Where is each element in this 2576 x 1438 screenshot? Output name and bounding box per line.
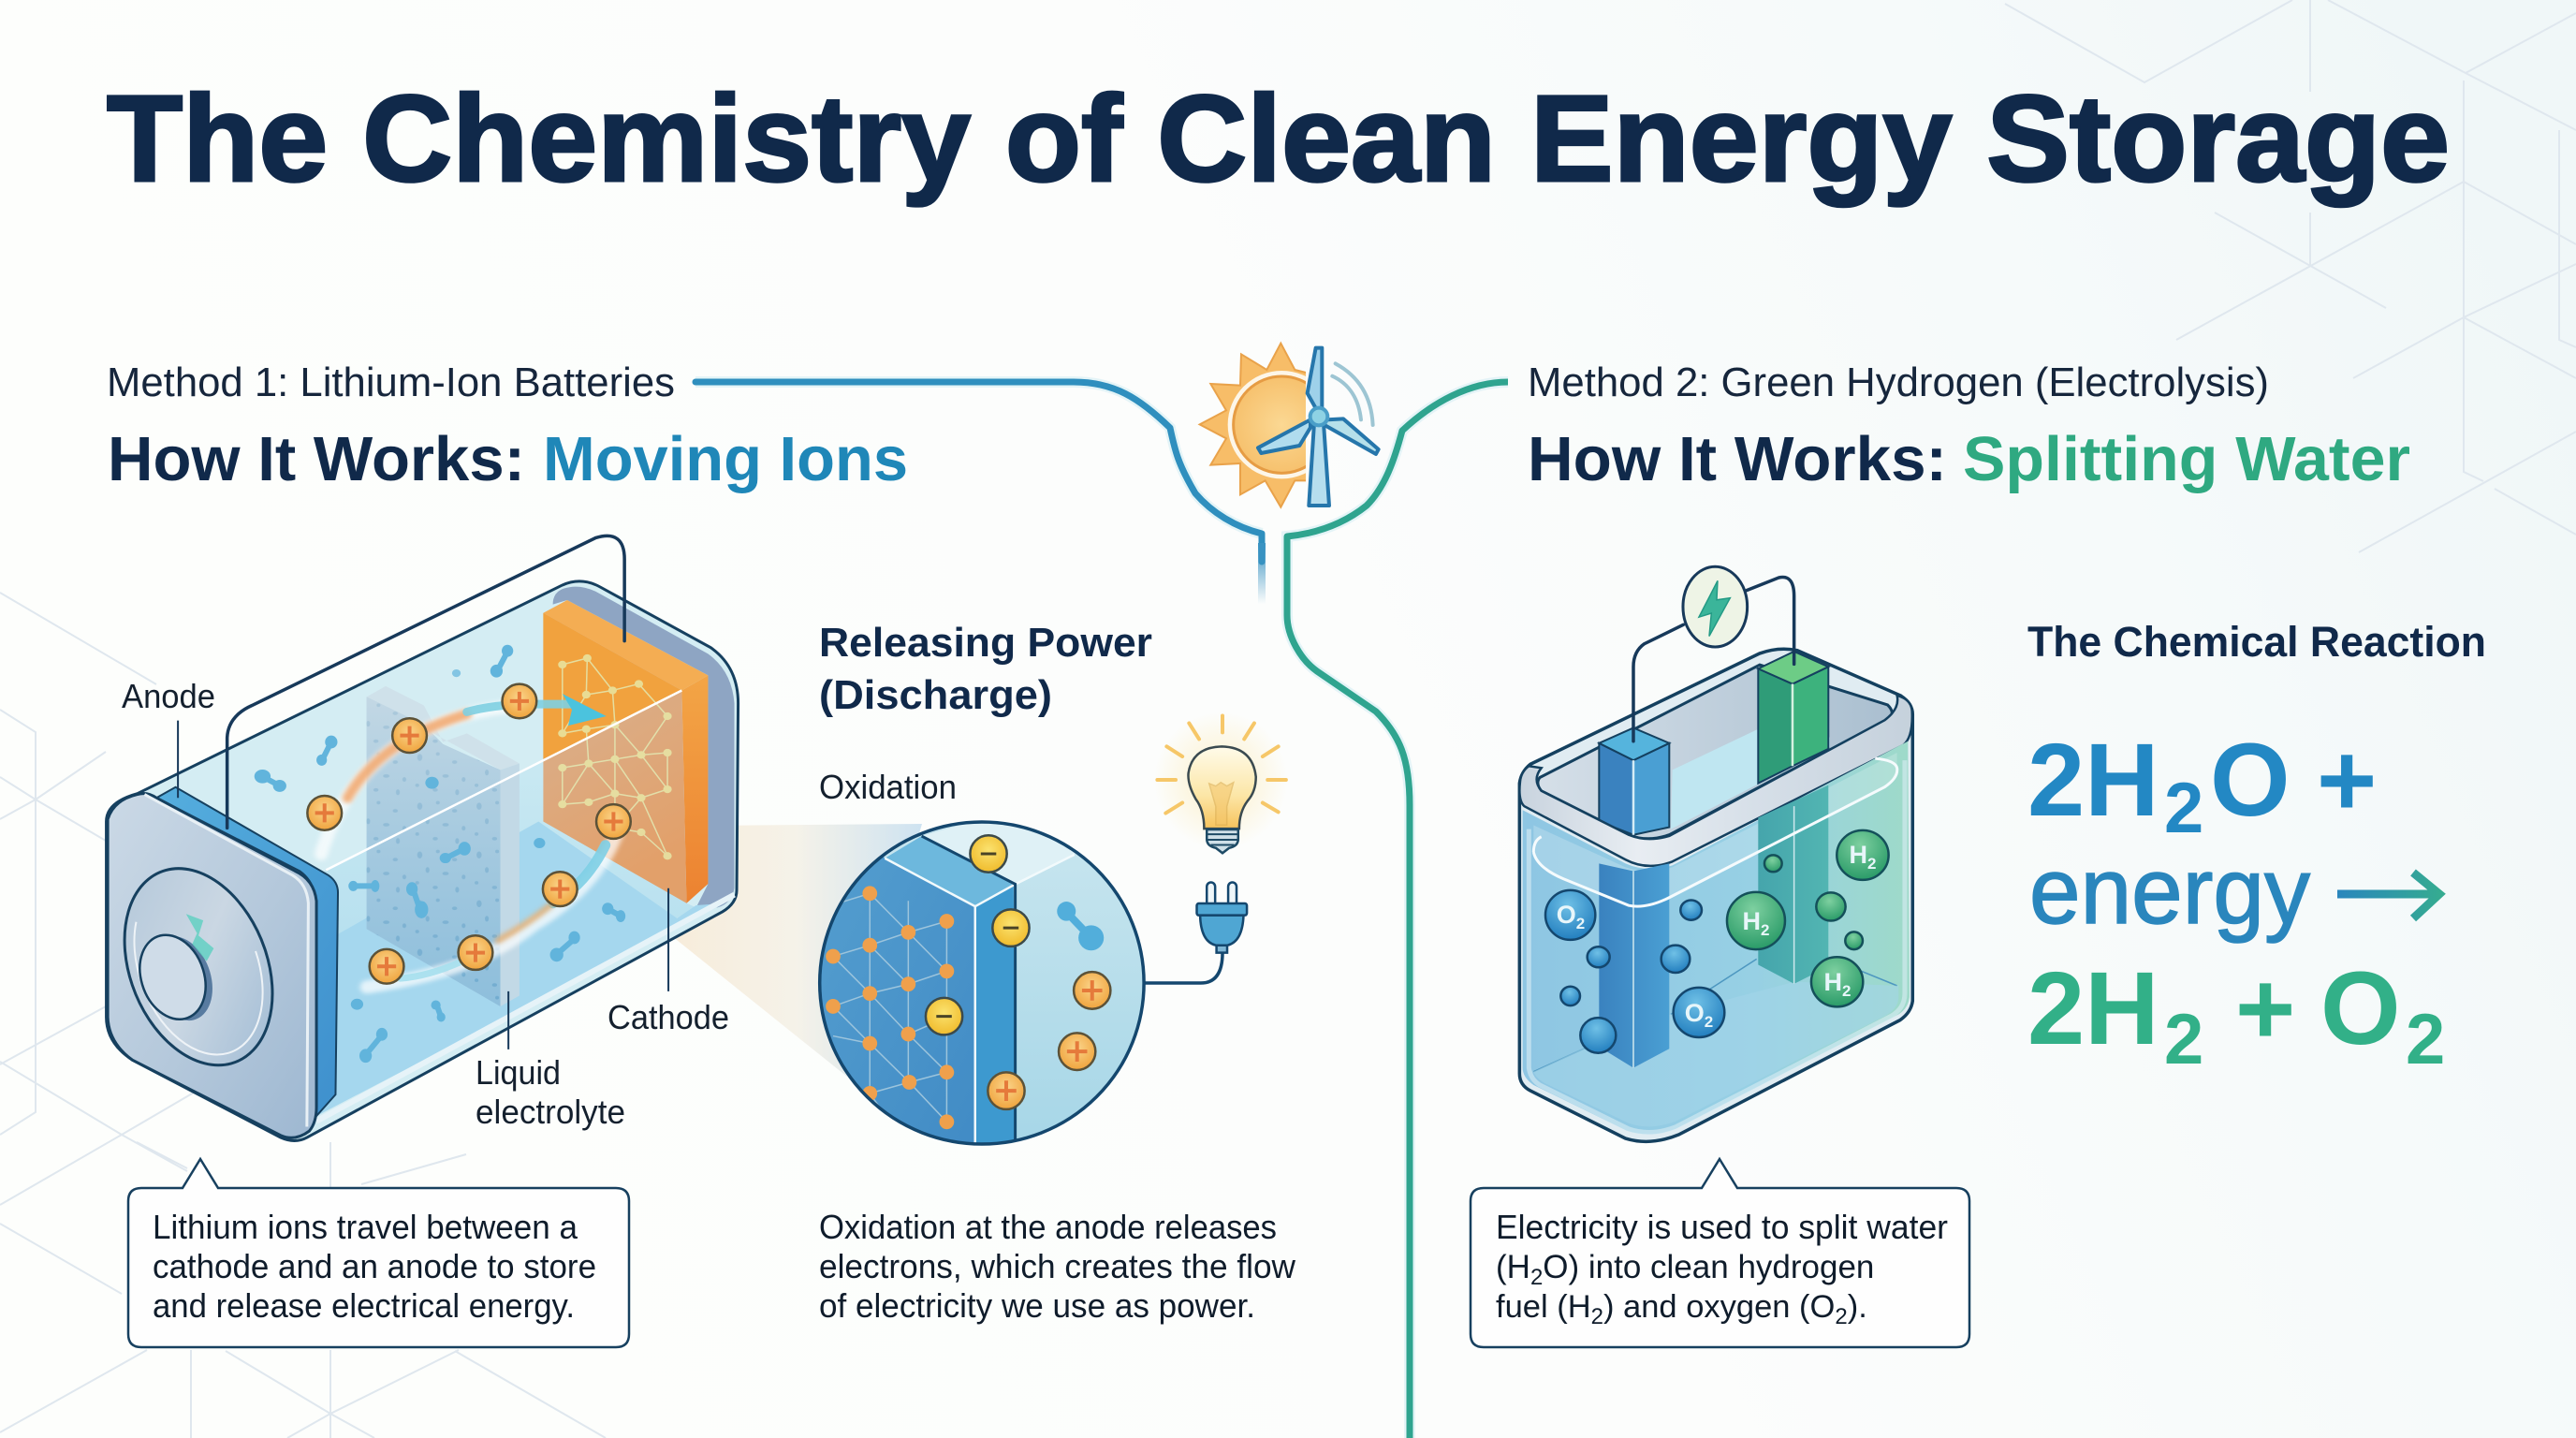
equation: products: O [2320,951,2401,1066]
callout: lithium ions: cathode and an anode to store [153,1247,596,1285]
icon: plug [1197,882,1247,953]
connector halo [695,382,1508,1438]
tank outline [1519,649,1912,1141]
blue electrode lower [1599,863,1669,1068]
text: oxidation explanation: electrons, which creates the flow [819,1247,1296,1285]
end cap edge highlight [144,795,308,1127]
oxygen and hydrogen bubbles [1545,830,1889,1053]
back water [1671,730,1830,829]
heading: the chemical reaction: The Chemical Reaction [2027,618,2486,666]
green electrode upper [1758,652,1828,784]
air gap above water surface [1533,753,1897,906]
callout: lithium ions: Lithium ions travel between a [153,1208,578,1246]
callout: electrolysis: 2 [1530,1265,1543,1290]
terminal disc [99,852,298,1081]
icon: bolt [1699,580,1730,637]
ion path arcs [321,704,617,987]
lithium ions [307,684,631,984]
cathode plate [543,600,708,903]
zoom cone [672,824,922,1077]
leader lines [178,721,668,1049]
blue electrode upper [1599,727,1669,835]
text: oxidation explanation: Oxidation at the anode releases [819,1208,1277,1246]
bubble labels: 2 [1576,915,1585,932]
zoom circle outline [820,822,1144,1144]
bubble labels: H [1743,907,1761,935]
callout: electrolysis: O) into clean hydrogen [1543,1249,1874,1285]
back plate [553,587,734,907]
label: liquid electrolyte: Liquid [476,1053,561,1092]
bubble labels: 2 [1842,982,1851,1000]
bubble labels: 2 [1761,921,1769,939]
glass side highlight [1529,760,1905,1133]
text: oxidation explanation: of electricity we use as power. [819,1286,1255,1325]
callout: lithium ions [128,1159,629,1347]
equation: reactants: O [2210,723,2291,838]
equation: arrow [2337,873,2439,918]
diagram: electrolysis tank [1519,566,1912,1141]
terminal disc highlight [112,865,285,1069]
equation: products [2027,951,2445,1079]
connector line: green [1287,382,1508,1438]
callout: electrolysis: ) and oxygen (O [1603,1289,1835,1325]
molecule [1066,912,1091,938]
callout: electrolysis [1471,1159,1969,1347]
circuit wires [1633,578,1794,741]
label: liquid electrolyte [476,1053,625,1131]
callout: electrolysis: 2 [1591,1304,1603,1329]
equation: products: 2 [2164,1000,2203,1079]
connector line: blue [695,382,1262,562]
equation: reactants: + [2317,723,2377,838]
equation: products: 2H [2027,951,2159,1066]
bubble labels: O [1685,999,1705,1027]
glass front face [316,690,696,1116]
anode band [156,787,338,1116]
floor tint [1533,982,1898,1126]
wire [227,536,624,828]
heading accent: moving ions: Moving Ions [543,424,908,494]
text: oxidation explanation [819,1208,1296,1325]
terminal cap shadow [140,930,222,1027]
heading: how it works splitting water: How It Works: [1528,424,1947,494]
bubble labels: 2 [1705,1013,1713,1031]
equation: reactants: 2H [2027,723,2159,838]
bolt mark [186,914,213,961]
water floor [316,822,724,1116]
icon: light bulb [1157,716,1286,853]
equation: products: + [2235,951,2295,1066]
tank rim [1519,696,1912,866]
ion arrow head [563,694,607,726]
label: cathode: Cathode [607,998,729,1036]
tank opening [1538,665,1892,839]
connector line: blue fading end [1258,543,1266,604]
molecules [255,645,625,1063]
bubble labels [1557,841,1876,1031]
label: oxidation: Oxidation [819,768,957,806]
zoom circle contents [821,824,1142,1142]
bubble labels: H [1850,841,1867,869]
white highlight line [326,690,681,870]
turbine [1258,348,1379,506]
green electrode lower [1758,785,1828,984]
equation: reactants [2027,723,2377,848]
equation: reactants: 2 [2164,769,2203,848]
floor line [1533,959,1897,1072]
heading: releasing power: (Discharge) [819,672,1052,718]
callout: electrolysis: (H [1496,1249,1530,1285]
bubble labels: H [1824,968,1842,996]
electrode edge lines [1633,806,1794,1068]
turbine arcs [1332,363,1373,425]
diagram: lithium-ion battery [99,536,739,1140]
battery casing [107,581,739,1140]
water body [1523,741,1910,1135]
callout: electrolysis: fuel (H [1496,1289,1591,1325]
label: anode: Anode [122,677,215,715]
electrons and ions [926,835,1110,1109]
label: liquid electrolyte: electrolyte [476,1093,625,1131]
diagram: oxidation zoom with bulb and plug [786,712,1288,1154]
power meter [1683,566,1748,647]
equation: energy: energy [2029,839,2310,944]
callout: electrolysis: 2 [1835,1304,1848,1329]
heading: how it works moving ions: How It Works: [108,424,525,494]
heading: releasing power: Releasing Power [819,620,1152,666]
water surface [1533,758,1897,906]
icon: glow [1154,712,1288,849]
bubble labels: O [1557,901,1576,929]
lattice [826,886,954,1129]
method 2 label: Method 2: Green Hydrogen (Electrolysis) [1528,360,2269,405]
callout: electrolysis: ). [1848,1289,1867,1325]
callout: electrolysis: Electricity is used to split water [1496,1208,1948,1246]
end cap [108,794,316,1137]
equation: products: 2 [2406,1000,2445,1079]
icon: sun and wind turbine [1200,344,1379,507]
bubble labels: 2 [1867,855,1876,873]
cord [1144,953,1222,983]
separator [367,686,520,1006]
method 1 label: Method 1: Lithium-Ion Batteries [107,360,675,405]
terminal cap [130,929,215,1026]
glass bottom highlight [316,895,734,1122]
callout: lithium ions: and release electrical energy. [153,1286,575,1325]
sun [1198,341,1306,509]
cathode lattice [558,654,672,859]
heading accent: splitting water: Splitting Water [1963,424,2410,494]
title: The Chemistry of Clean Energy Storage [107,69,2450,207]
heading: releasing power [819,620,1152,718]
